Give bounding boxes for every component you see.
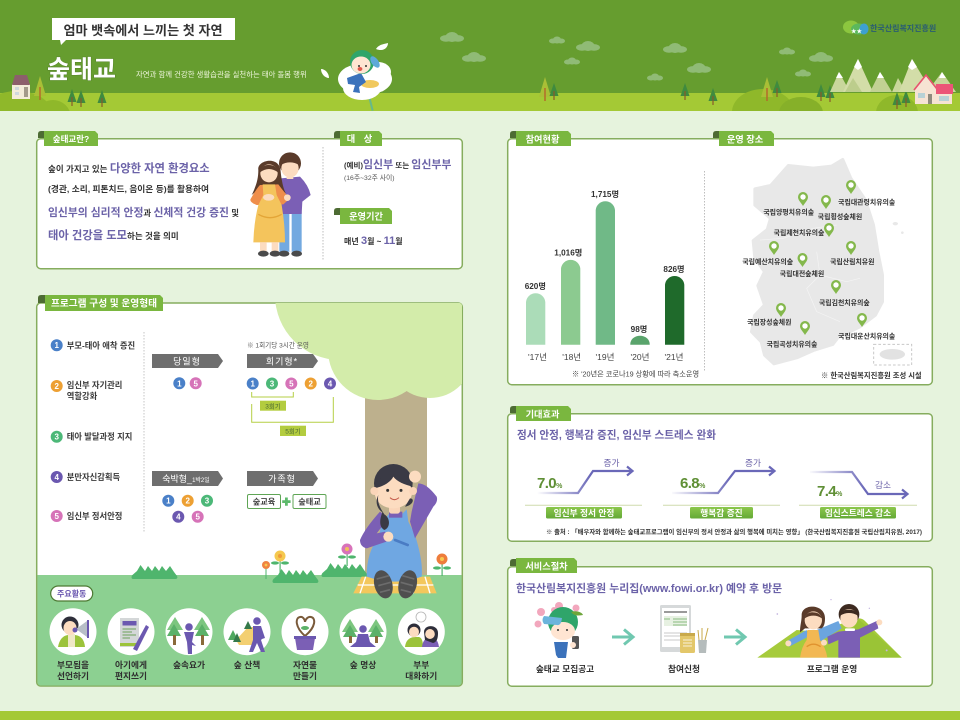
map note: ※ 한국산림복지진흥원 조성 시설: [821, 371, 922, 380]
effect: stress reduction: 감소: [875, 479, 891, 490]
session type numbers: 1: [250, 380, 255, 388]
speech bubble title: 엄마 뱃속에서 느끼는 첫 자연: [63, 23, 223, 38]
logo: ★★: [851, 29, 863, 35]
step 1: recruitment mascot: [534, 602, 583, 658]
mascot on flower: [321, 43, 392, 111]
overnight numbers: 5: [195, 513, 200, 522]
panel: service procedure: [508, 558, 932, 686]
activity labels: 편지쓰기: [115, 670, 147, 681]
activity labels: 만들기: [293, 670, 317, 681]
overnight numbers: 1: [166, 497, 171, 506]
session type numbers: 4: [328, 380, 333, 388]
effect: happiness: 행복감 증진: [700, 507, 743, 518]
tab: 숲태교란?: [38, 131, 98, 146]
location labels: 국립김천치유의숲: [819, 298, 870, 307]
chart note: ※ '20년은 코로나19 상황에 따라 축소운영: [572, 370, 699, 378]
step 3: program illustration: [757, 599, 902, 658]
location labels: 국립대운산치유의숲: [838, 332, 896, 340]
girl under tree: [353, 464, 437, 601]
location labels: 국립제천치유의숲: [774, 228, 825, 237]
location labels: 국립대전숲체원: [780, 269, 824, 278]
activity labels: 숲 명상: [350, 659, 376, 670]
goal list: 4: [54, 473, 59, 482]
logo: [843, 20, 936, 35]
activity labels: 부모됨을: [57, 659, 89, 670]
location labels: 국립양평치유의숲: [763, 208, 815, 216]
definition text: [48, 161, 239, 242]
goal list: 태아 발달과정 지지: [67, 432, 132, 442]
bottom bar: [0, 711, 960, 720]
goal list: 5: [54, 512, 59, 521]
couple illustration: [250, 152, 311, 257]
activity: letter to baby: [108, 608, 154, 655]
activity labels: [57, 659, 437, 681]
tab: 기대효과: [510, 406, 571, 421]
tag: 당일형: 당일형: [173, 356, 201, 366]
bar chart: [525, 189, 685, 362]
tab: 대상: 대 상: [347, 133, 375, 144]
effect: emotional stability: 임신부 정서 안정: [554, 507, 614, 518]
bar chart: 620명: [525, 281, 546, 291]
tab: 서비스절차: 서비스절차: [525, 560, 568, 571]
effect: stress reduction: 임신스트레스 감소: [825, 507, 891, 518]
step 2 label: 참여신청: [668, 663, 700, 674]
goal list: 분만자신감획득: [67, 472, 120, 482]
activity: declare parenthood: [50, 608, 96, 655]
goal list: 임신부 정서안정: [67, 511, 122, 521]
bar chart: 1,016명: [554, 248, 582, 258]
logo: 한국산림복지진흥원: [870, 23, 936, 33]
tab: 운영기간: [334, 208, 392, 224]
session type numbers: [247, 378, 336, 390]
session type numbers: 2: [308, 380, 313, 388]
bar chart: '20년: [631, 352, 649, 362]
bar chart: '21년: [665, 352, 683, 362]
tag: 당일형: [152, 354, 223, 368]
location labels: 국립횡성숲체원: [818, 212, 862, 221]
target text: (16주~32주 사이): [344, 173, 395, 182]
location pins: [769, 180, 867, 335]
bar chart: '17년: [528, 352, 547, 362]
arrow 2: [724, 630, 745, 644]
goal list: 1: [54, 341, 59, 350]
bracket: 3 sessions: 3회기: [265, 401, 281, 410]
main title: 숲태교: [47, 56, 116, 84]
bar chart: 826명: [663, 264, 685, 274]
hills and scenery: [0, 76, 918, 111]
effect: emotional stability: 7.0%: [537, 475, 563, 492]
arrow 1: [612, 630, 633, 644]
tab: 참여현황: [510, 131, 571, 146]
tab: 프로그램 구성 및 운영형태: [38, 295, 163, 311]
service heading: 한국산림복지진흥원 누리집(www.fowi.or.kr) 예약 후 방문: [516, 581, 782, 595]
day type numbers: 5: [193, 379, 198, 388]
goal list: 임신부 자기관리: [67, 380, 122, 390]
panel: program composition: [36, 295, 464, 687]
family type boxes: 숲태교: [298, 496, 321, 506]
goal list: 2: [54, 382, 59, 391]
effect: happiness: [663, 458, 780, 518]
activity: forest meditation: [340, 608, 386, 655]
note: session length: ※ 1회기당 3시간 운영: [247, 340, 309, 350]
activity: forest walk: [224, 608, 270, 655]
definition text: 태아 건강을 도모하는 것을 의미: [48, 228, 179, 242]
goal list: 역할강화: [67, 391, 98, 401]
tag: 회기형: 회기형*: [266, 356, 298, 366]
location labels: 국립곡성치유의숲: [767, 340, 818, 348]
location labels: [742, 198, 896, 348]
tag: 숙박형: 숙박형_1박2일: [162, 474, 210, 484]
bracket: 5 sessions: [252, 397, 333, 436]
activity labels: 자연물: [293, 659, 317, 670]
definition text: (경관, 소리, 피톤치드, 음이온 등)를 활용하여: [48, 183, 209, 194]
effect: stress reduction: [799, 472, 917, 518]
step 1 label: 숲태교 모집공고: [536, 663, 594, 674]
tab: 운영 장소: 운영 장소: [727, 134, 764, 144]
flowers: [262, 544, 451, 579]
header banner: [0, 0, 960, 111]
panel: participation and locations: [508, 131, 932, 385]
tag: 숙박형: [152, 471, 223, 486]
location labels: 국립예산치유의숲: [742, 257, 794, 266]
tag: 가족형: [247, 471, 318, 486]
definition text: 임신부의 심리적 안정과 신체적 건강 증진 및: [48, 206, 239, 219]
subtitle: 자연과 함께 건강한 생활습관을 실천하는 태아 돌봄 행위: [136, 70, 307, 79]
definition text: 숲이 가지고 있는 다양한 자연 환경요소: [48, 161, 210, 175]
activity labels: 대화하기: [405, 670, 437, 681]
panel: expected effects: [508, 406, 932, 541]
label: main activities: 주요활동: [57, 588, 87, 598]
left house: [12, 75, 30, 99]
tree: [276, 303, 462, 575]
effect: emotional stability: 증가: [604, 458, 620, 468]
activity labels: 부부: [413, 660, 429, 670]
activity labels: 선언하기: [57, 670, 89, 681]
effect: happiness: 6.8%: [680, 475, 706, 492]
activity: nature craft: [282, 608, 328, 655]
bar chart: 1,715명: [591, 189, 619, 199]
activity labels: 아기에게: [115, 659, 147, 670]
overnight numbers: 2: [185, 497, 190, 506]
location labels: 국립산림치유원: [830, 257, 874, 266]
goal list: 3: [54, 433, 59, 442]
overnight numbers: [162, 495, 213, 523]
location labels: 국립장성숲체원: [747, 318, 791, 326]
session type numbers: 3: [270, 380, 275, 388]
right house: [914, 75, 953, 104]
bushes: [132, 563, 367, 583]
effect: emotional stability: [525, 458, 642, 518]
bar chart: 98명: [631, 324, 647, 334]
tab: 대상: [334, 131, 382, 146]
label: main activities: [51, 586, 93, 601]
activity labels: 숲속요가: [173, 659, 205, 670]
step 3 label: 프로그램 운영: [807, 663, 857, 674]
session type numbers: 5: [289, 380, 294, 388]
tab: 프로그램 구성 및 운영형태: 프로그램 구성 및 운영형태: [51, 296, 157, 310]
speech bubble title: [52, 18, 235, 45]
tab: 운영기간: 운영기간: [349, 210, 383, 222]
step 2: application documents: [660, 605, 708, 653]
map of Korea: [752, 160, 912, 365]
tab: 참여현황: 참여현황: [526, 134, 560, 144]
day type numbers: 1: [177, 379, 182, 388]
activity: couple talk: [398, 608, 445, 655]
tab: 서비스절차: [510, 558, 577, 573]
activity: forest yoga: [166, 608, 212, 655]
bar chart: '19년: [596, 352, 614, 362]
overnight numbers: 4: [176, 513, 181, 522]
tab: 기대효과: 기대효과: [526, 408, 560, 419]
tag: 가족형: 가족형: [268, 474, 296, 484]
bracket: 5 sessions: 5회기: [285, 426, 301, 436]
goal list: [51, 339, 135, 522]
day type numbers: [173, 377, 202, 389]
family type boxes: 숲교육: [253, 496, 276, 506]
tab: 숲태교란?: 숲태교란?: [53, 134, 89, 144]
bracket: 3 sessions: [252, 392, 293, 411]
mountains: [830, 59, 956, 92]
activity labels: 숲 산책: [234, 659, 260, 670]
tab: 운영 장소: [713, 131, 774, 146]
overnight numbers: 3: [205, 497, 210, 506]
panel: what is forest prenatal education: [37, 131, 462, 269]
effect: happiness: 증가: [745, 458, 761, 468]
location labels: 국립대관령치유의숲: [838, 198, 896, 206]
target text: (예비)임신부 또는 임신부부: [344, 158, 451, 171]
goal list: 부모-태아 애착 증진: [67, 340, 135, 350]
target text: [344, 158, 451, 182]
family type boxes: [248, 494, 326, 508]
period text: 매년 3월 ~ 11월: [344, 235, 403, 247]
effects heading: 정서 안정, 행복감 증진, 임신부 스트레스 완화: [517, 428, 716, 442]
tag: 회기형: [247, 354, 318, 368]
effect: stress reduction: 7.4%: [817, 483, 843, 500]
ground: [38, 575, 462, 686]
bar chart: '18년: [562, 352, 581, 362]
source note: ※ 출처 : 「배우자와 함께하는 숲태교프로그램이 임신부의 정서 안정과 삶의 행복에 미치는 영향」 (한국산림복지진흥원 국립산림치유원, 2017): [546, 527, 922, 536]
